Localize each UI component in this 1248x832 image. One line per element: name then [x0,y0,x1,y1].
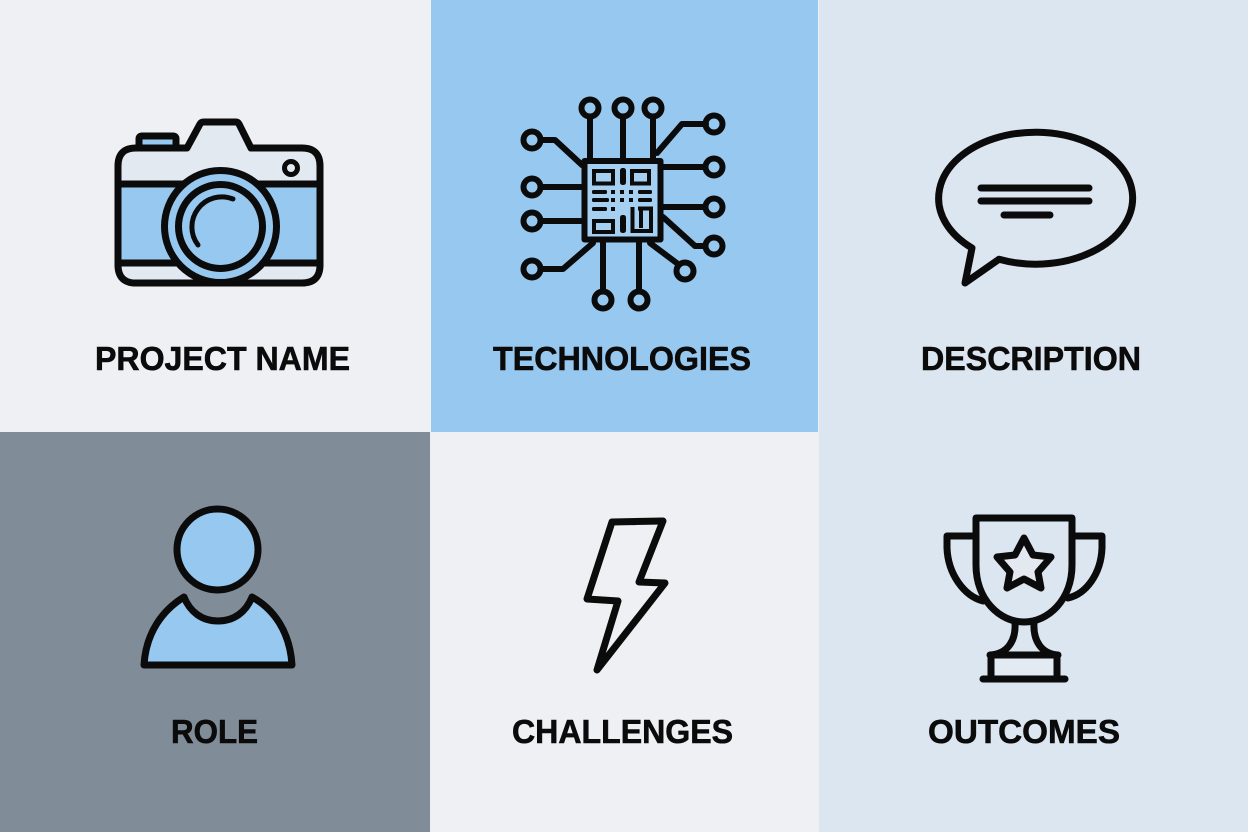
panel: challenges [431,432,818,832]
icon: lightning bolt [587,521,665,670]
label: description: DESCRIPTION [921,340,1141,377]
panel: project name [0,0,431,432]
label: technologies: TECHNOLOGIES [493,340,751,377]
label: role: ROLE [171,713,258,750]
panel: outcomes [819,432,1248,832]
panel: technologies [431,0,818,432]
panel: role [0,432,430,832]
label: project name: PROJECT NAME [95,340,350,377]
label: outcomes: OUTCOMES [928,713,1120,750]
icon: camera [118,122,320,283]
icon: person [144,509,292,665]
panel: description [819,0,1248,432]
icon: circuit chip [524,100,722,308]
icon: trophy [947,518,1102,679]
icon: speech bubble [939,132,1133,283]
label: challenges: CHALLENGES [512,713,733,750]
